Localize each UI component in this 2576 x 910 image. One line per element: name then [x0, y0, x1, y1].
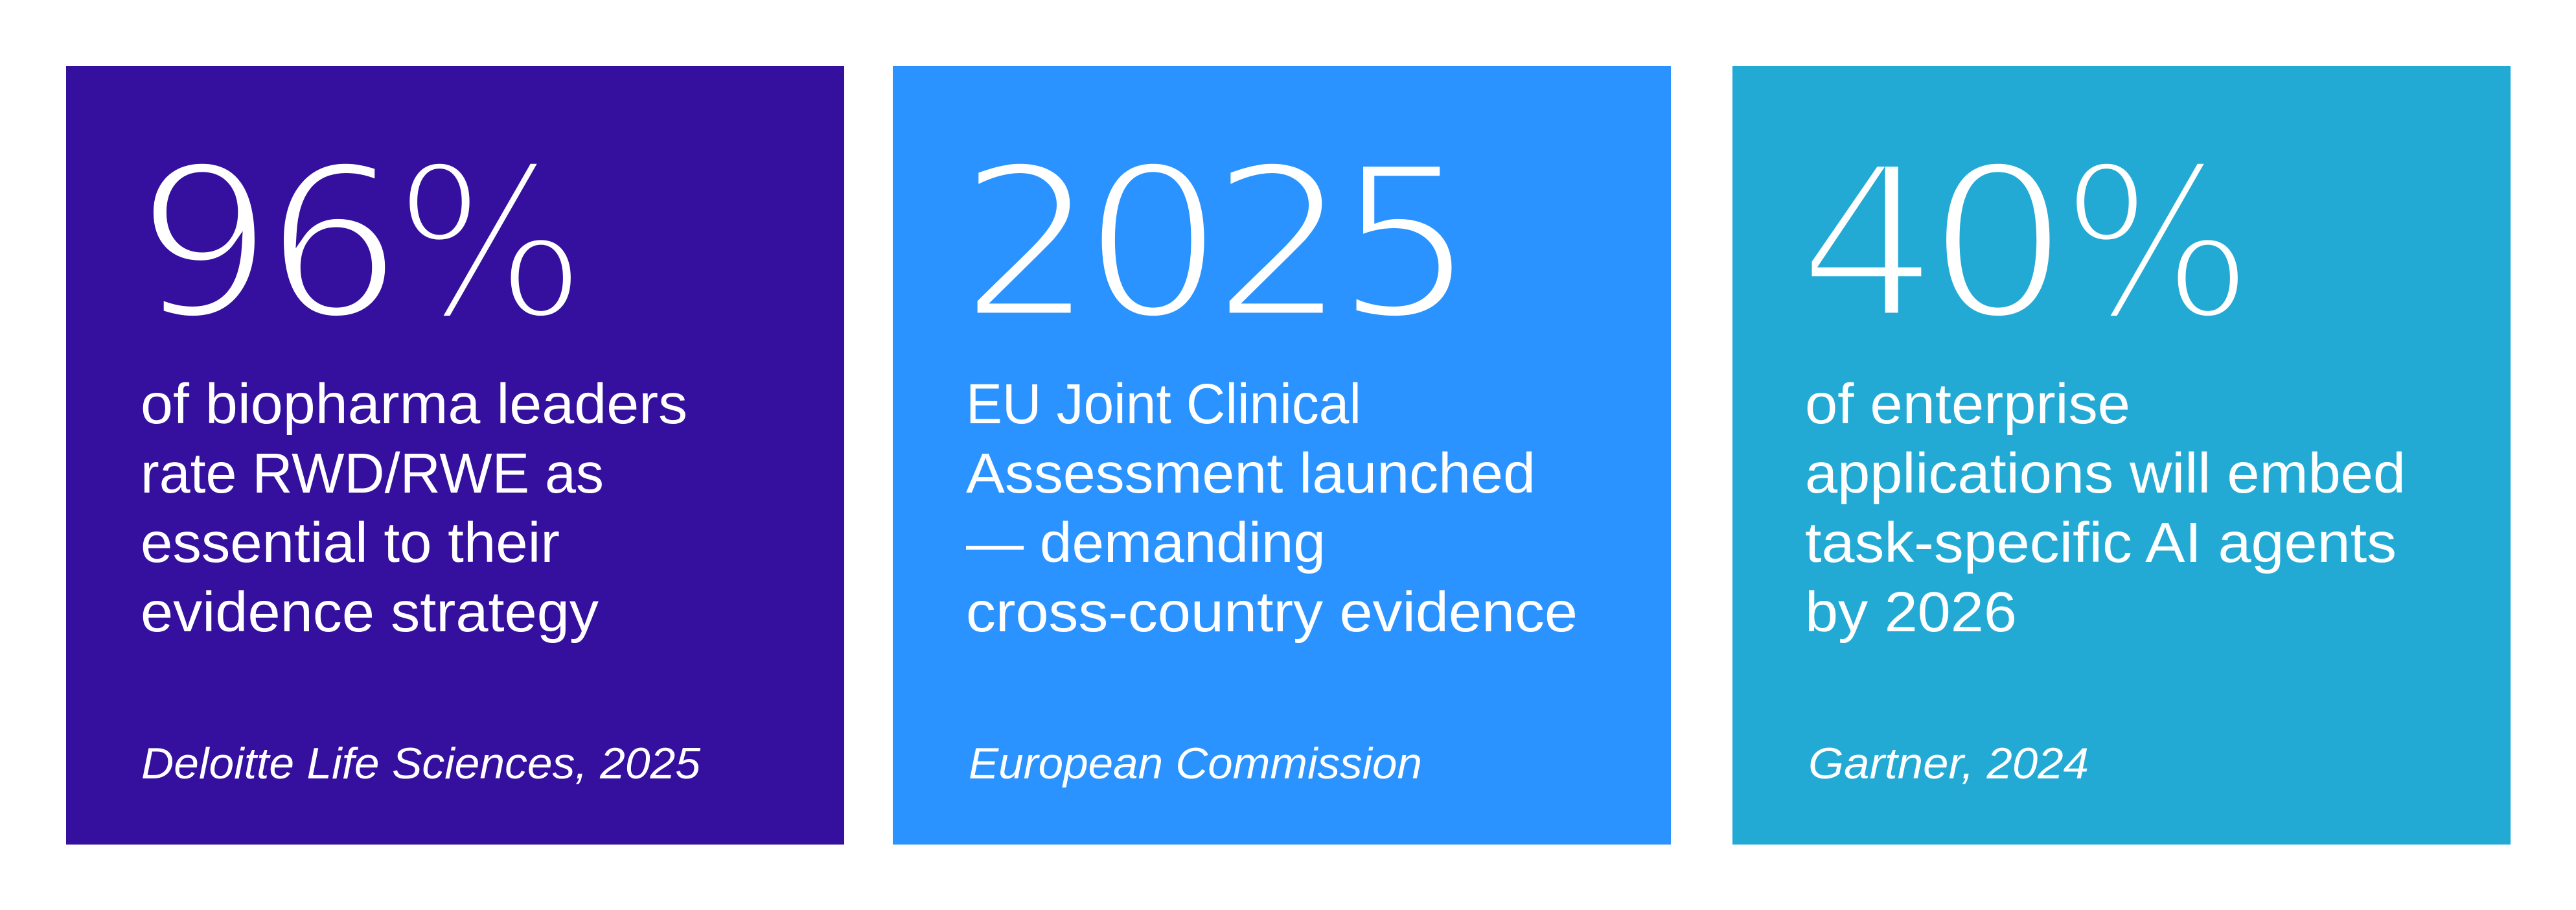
- body text: enterprise applications: [1805, 373, 2406, 644]
- panel background teal: [1732, 66, 2511, 845]
- body text: biopharma leaders: of biopharma leaders: [141, 373, 687, 436]
- panel background purple: [66, 66, 844, 845]
- big number: 40%: 40: [1797, 121, 2058, 368]
- big number: 96%: 96: [135, 121, 393, 368]
- body text: enterprise applications: by 2026: [1805, 581, 2017, 644]
- body text: EU Joint Clinical Assessment: Assessment launched: [966, 442, 1535, 505]
- body text: enterprise applications: task-specific AI agents: [1805, 511, 2397, 574]
- body text: biopharma leaders: rate RWD/RWE as: [141, 442, 604, 505]
- source: Deloitte Life Sciences, 2025: Deloitte Life Sciences, 2025: [141, 739, 700, 788]
- body text: EU Joint Clinical Assessment: cross-country evidence: [966, 581, 1578, 644]
- body text: enterprise applications: of enterprise: [1805, 373, 2130, 436]
- body text: biopharma leaders: essential to their: [141, 511, 560, 574]
- panel: 2025 EU Joint Clinical Assessment: [893, 66, 1671, 845]
- body text: EU Joint Clinical Assessment: [966, 373, 1578, 644]
- body text: EU Joint Clinical Assessment: EU Joint Clinical: [966, 373, 1361, 436]
- big number: 96%: %: [395, 121, 586, 368]
- body text: EU Joint Clinical Assessment: — demanding: [966, 511, 1326, 574]
- source: European Commission: European Commission: [969, 739, 1422, 788]
- body text: biopharma leaders: [141, 373, 687, 644]
- big number: 2025: 2025: [957, 120, 1461, 367]
- body text: biopharma leaders: evidence strategy: [141, 581, 599, 644]
- panel: 96% biopharma leaders: [66, 66, 844, 845]
- body text: enterprise applications: applications will embed: [1805, 442, 2406, 505]
- big number: 40%: [1797, 121, 2253, 368]
- big number: 40%: %: [2062, 121, 2253, 368]
- big number: 96%: [135, 121, 586, 368]
- source: Gartner, 2024: Gartner, 2024: [1808, 739, 2089, 788]
- panel: 40% enterprise applications: [1732, 66, 2511, 845]
- panel background blue: [893, 66, 1671, 845]
